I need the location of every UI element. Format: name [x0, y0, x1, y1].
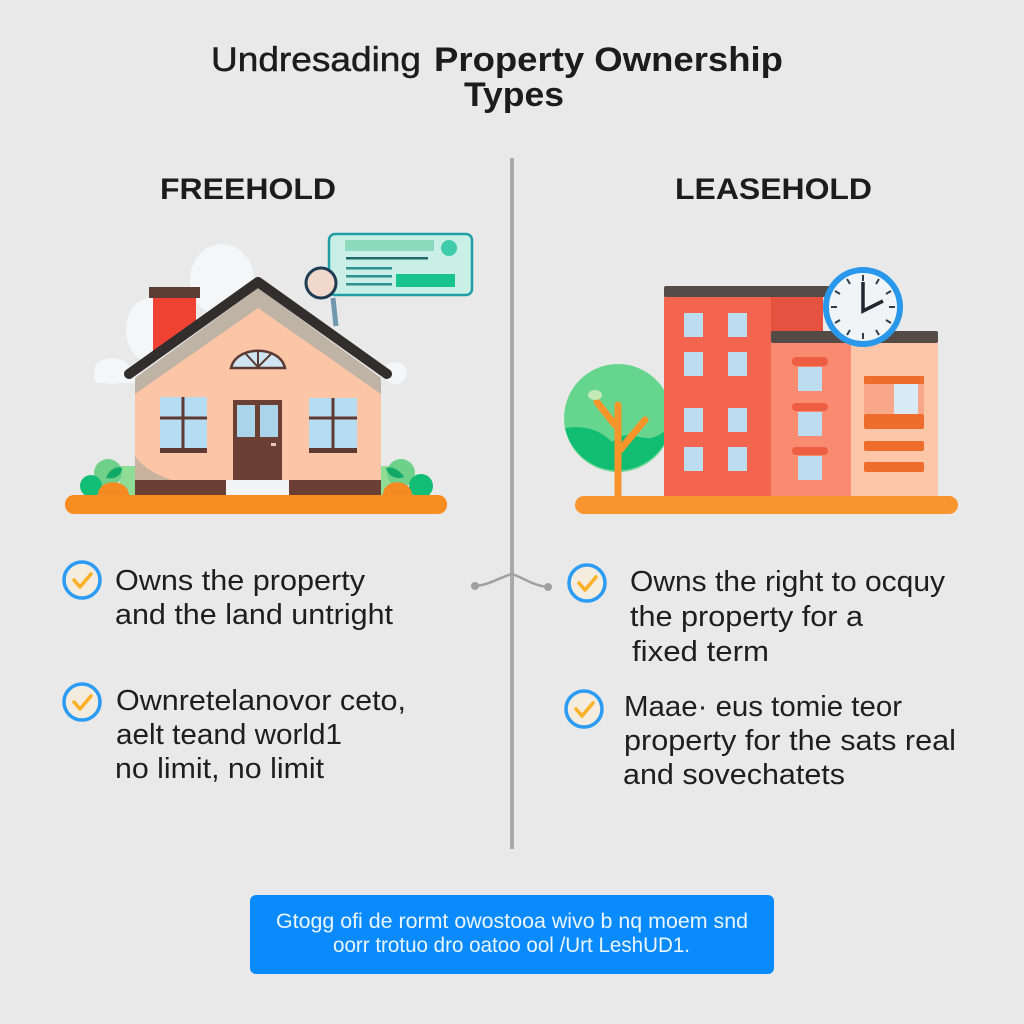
text: fixed term: [632, 636, 769, 668]
magnifier: [306, 268, 336, 326]
light block: [851, 342, 938, 496]
left window: [160, 397, 207, 453]
right window: [309, 398, 357, 453]
text: Owns the right to ocquy: [630, 566, 946, 598]
tall red block: [664, 286, 839, 496]
text: [115, 685, 406, 785]
title: [211, 41, 783, 114]
door: [233, 400, 282, 480]
corner shade: [135, 456, 172, 480]
arched window: [231, 351, 285, 368]
walls: [135, 293, 381, 482]
illustration: freehold house: [65, 234, 472, 514]
text: [630, 566, 946, 668]
text: Owns the property: [115, 565, 366, 597]
title: Undresading: [211, 41, 421, 79]
text: and the land untright: [115, 599, 393, 631]
banner text: [276, 910, 748, 957]
center divider: [510, 158, 514, 849]
text: and sovechatets: [623, 759, 845, 791]
text: Ownretelanovor ceto,: [116, 685, 406, 717]
check icon: [566, 691, 602, 727]
leasehold point 1: [569, 565, 946, 668]
freehold point 1: [64, 562, 393, 631]
title: Types: [464, 76, 564, 114]
text: [115, 565, 393, 631]
check icon: [569, 565, 605, 601]
text: the property for a: [630, 601, 864, 633]
freehold point 2: [64, 684, 406, 785]
heading: freehold: FREEHOLD: [160, 173, 336, 206]
illustration: leasehold building: [564, 270, 958, 514]
tree: [564, 364, 672, 495]
ground: [575, 496, 958, 514]
gable band: [135, 288, 381, 394]
banner text: Gtogg ofi de rormt owostooa wivo b nq moem snd: [276, 910, 748, 933]
clouds: [94, 244, 407, 384]
text: property for the sats real: [624, 725, 956, 757]
right bushes: [381, 459, 433, 498]
chimney: [149, 287, 200, 352]
divider connector: [471, 574, 552, 591]
foundation: [135, 480, 381, 495]
check icon: [64, 684, 100, 720]
summary banner: [250, 895, 774, 974]
left bushes: [80, 459, 135, 497]
middle block: [771, 342, 851, 496]
ground: [65, 495, 447, 514]
leasehold point 2: [566, 691, 956, 791]
clock: [826, 270, 900, 344]
title: Property Ownership: [434, 41, 783, 79]
text: no limit, no limit: [115, 753, 324, 785]
check icon: [64, 562, 100, 598]
text: Maae· eus tomie teor: [624, 691, 902, 723]
heading: leasehold: LEASEHOLD: [675, 173, 872, 206]
document card: [329, 234, 472, 295]
text: [623, 691, 956, 791]
banner text: oorr trotuo dro oatoo ool /Urt LeshUD1.: [333, 934, 690, 957]
roof: [129, 282, 387, 374]
text: aelt teand world1: [116, 719, 342, 751]
lower roof: [771, 331, 938, 343]
